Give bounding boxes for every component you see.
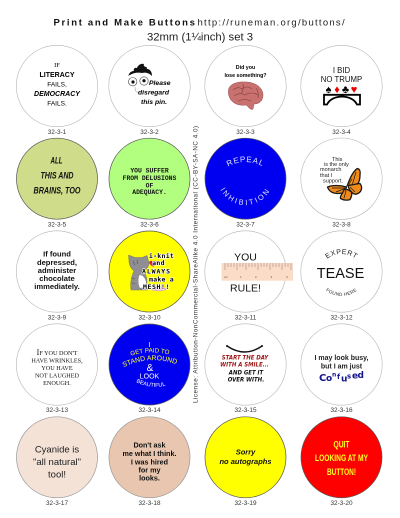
button 32-3-8: This	[332, 157, 343, 163]
icon: card suits: ♣	[342, 84, 349, 96]
button 32-3-14: GET PAID TO	[130, 348, 170, 356]
icon: ruler: cm	[224, 275, 228, 279]
icon: bridge	[324, 95, 360, 104]
button 32-3-6: YOU SUFFER	[130, 168, 169, 174]
button 32-3-2	[109, 45, 190, 136]
button 32-3-13: ENOUGH.	[43, 380, 71, 387]
button 32-3-6: 32-3-6	[140, 222, 159, 228]
button 32-3-19: no autographs	[219, 457, 272, 466]
icon: brain	[228, 82, 263, 110]
button 32-3-18: me what I think.	[123, 449, 176, 458]
title: http://runeman.org/buttons/	[198, 18, 346, 28]
button 32-3-19	[205, 417, 286, 507]
confused wordmark: n	[332, 372, 336, 378]
button 32-3-15: AND GET IT	[228, 370, 265, 376]
button 32-3-18: Don't ask	[133, 441, 166, 450]
button 32-3-15: 32-3-15	[234, 407, 257, 414]
button 32-3-10: 32-3-10	[138, 314, 161, 322]
button 32-3-9: chocolate	[39, 274, 75, 283]
button 32-3-18	[109, 417, 190, 507]
icon: card suits: ♥	[351, 84, 357, 96]
button 32-3-6: ADEQUACY.	[132, 189, 167, 196]
button 32-3-4	[301, 45, 382, 136]
button 32-3-13: IF YOU DON'T	[37, 348, 78, 357]
icon: smile	[226, 345, 263, 352]
button 32-3-20: 32-3-20	[330, 500, 353, 507]
button 32-3-6: OF	[146, 182, 153, 190]
confused wordmark: e	[352, 372, 358, 382]
button 32-3-14: 32-3-14	[138, 407, 161, 414]
button 32-3-7: REPEAL	[226, 156, 262, 166]
button 32-3-13: 32-3-13	[46, 407, 68, 414]
button 32-3-10: make a	[149, 276, 174, 284]
button 32-3-1: IF	[54, 62, 60, 69]
button 32-3-16: but I am just	[321, 364, 363, 370]
button 32-3-3: Did you	[236, 65, 255, 71]
button 32-3-13: YOU HAVE	[41, 365, 73, 372]
button 32-3-17: Cyanide is	[35, 444, 79, 456]
button 32-3-6	[109, 138, 190, 228]
button 32-3-5: ALL	[50, 156, 62, 166]
button 32-3-11	[205, 231, 293, 322]
confused wordmark: f	[337, 373, 341, 381]
confused wordmark: C	[319, 373, 326, 384]
confused wordmark: o	[326, 374, 332, 384]
icon: ruler: 4	[286, 275, 288, 279]
icon: card suits	[326, 84, 357, 96]
button 32-3-1: LITERACY	[40, 72, 75, 79]
icon: cat	[128, 255, 168, 291]
button 32-3-16	[301, 324, 382, 414]
button 32-3-9: If found	[43, 250, 71, 258]
confused wordmark: s	[347, 372, 351, 380]
button 32-3-8	[301, 138, 382, 228]
button 32-3-13: NOT LAUGHED	[35, 372, 80, 380]
button 32-3-14: BEAUTIFUL	[136, 378, 166, 387]
button 32-3-9: immediately.	[34, 282, 80, 291]
button 32-3-3: 32-3-3	[236, 129, 255, 136]
title: Print and Make Buttons	[54, 18, 197, 28]
button 32-3-2: Please	[149, 80, 171, 87]
button 32-3-14: STAND AROUND	[122, 355, 177, 366]
button 32-3-1: FAILS,	[47, 82, 67, 88]
button 32-3-10: MESH!!	[143, 283, 170, 291]
button 32-3-1: DEMOCRACY	[34, 91, 81, 98]
button 32-3-19: Sorry	[236, 447, 256, 456]
button 32-3-11: 32-3-11	[235, 314, 257, 322]
button 32-3-2: this pin.	[141, 99, 167, 106]
confused wordmark	[319, 371, 364, 384]
button 32-3-12: EXPERT	[325, 249, 358, 258]
button 32-3-9: depressed,	[37, 258, 77, 267]
icon: ruler: 3	[270, 275, 272, 279]
button 32-3-5: THIS AND	[40, 170, 74, 180]
button 32-3-10: i-knit	[149, 252, 174, 260]
button 32-3-18: 32-3-18	[138, 500, 161, 507]
button 32-3-19: 32-3-19	[234, 500, 257, 507]
button 32-3-12: TEASE	[317, 266, 365, 282]
button 32-3-7: INHIBITION	[220, 188, 270, 206]
button 32-3-20	[301, 417, 382, 507]
button 32-3-1: FAILS.	[47, 100, 67, 108]
title	[54, 18, 346, 43]
button 32-3-3: lose something?	[224, 73, 267, 79]
button 32-3-20: QUIT	[334, 439, 350, 449]
button 32-3-14: &	[147, 363, 154, 374]
button 32-3-16: I may look busy,	[315, 355, 369, 362]
button 32-3-12	[300, 230, 382, 322]
button 32-3-5: 32-3-5	[48, 222, 67, 228]
button 32-3-12: 32-3-12	[330, 314, 353, 322]
button 32-3-20: LOOKING AT MY	[315, 453, 368, 463]
button 32-3-9: administer	[38, 266, 76, 275]
button 32-3-16: 32-3-16	[330, 407, 353, 414]
button 32-3-2: 32-3-2	[140, 129, 159, 136]
button 32-3-7: 32-3-7	[236, 222, 255, 228]
button 32-3-20: BUTTON!	[327, 467, 356, 477]
button 32-3-8: that I	[320, 173, 333, 179]
button 32-3-18: looks.	[139, 474, 160, 483]
icon: card suits: ♦	[334, 84, 340, 96]
button 32-3-7	[204, 138, 286, 228]
icon: ruler	[222, 263, 293, 281]
button 32-3-8: 32-3-8	[332, 222, 351, 228]
button 32-3-8: is the only	[324, 162, 349, 168]
button 32-3-11: RULE!	[230, 282, 261, 294]
button 32-3-5	[16, 138, 98, 228]
icon: ruler: 2	[255, 275, 257, 279]
button 32-3-15: START THE DAY	[222, 354, 269, 362]
icon: ruler: 1	[240, 275, 242, 279]
button 32-3-8: monarch	[320, 167, 341, 173]
button 32-3-5: BRAINS, TOO	[34, 186, 80, 196]
button 32-3-15	[205, 324, 286, 414]
confused wordmark: u	[341, 374, 347, 384]
button 32-3-17: 32-3-17	[46, 500, 68, 507]
button 32-3-14	[108, 324, 190, 414]
button 32-3-8: support.	[323, 179, 343, 185]
button 32-3-4: NO TRUMP	[321, 75, 362, 84]
button 32-3-1: 32-3-1	[48, 129, 67, 136]
button 32-3-14: LOOK	[140, 374, 160, 380]
button 32-3-17: tool!	[48, 470, 66, 480]
button 32-3-13	[16, 324, 98, 414]
button 32-3-6: FROM DELUSIONS	[123, 175, 177, 182]
button 32-3-10: and	[152, 259, 165, 267]
button 32-3-13: HAVE WRINKLES,	[31, 358, 83, 364]
license text: License: Attribution-NonCommercial-ShareAlike 4.0 International (CC-BY-SA-NC 4.0)	[192, 125, 200, 403]
button 32-3-10: ALWAYS	[142, 268, 171, 276]
button 32-3-18: I was hired	[131, 457, 168, 466]
button 32-3-17: "all natural"	[33, 457, 81, 468]
button 32-3-9	[16, 231, 98, 322]
button 32-3-15: WITH A SMILE...	[220, 362, 269, 368]
button 32-3-15: OVER WITH.	[228, 376, 264, 384]
button 32-3-4: I BID	[333, 66, 351, 75]
button 32-3-2: disregard	[138, 90, 170, 96]
button 32-3-11: YOU	[234, 252, 257, 264]
button 32-3-4: 32-3-4	[332, 129, 351, 136]
icon: cartoon face	[128, 64, 152, 92]
button 32-3-1	[16, 45, 98, 136]
title: 32mm (1¼inch) set 3	[147, 31, 253, 43]
button 32-3-14: I	[148, 340, 151, 349]
button 32-3-10	[109, 231, 190, 322]
icon: monarch butterfly	[328, 168, 362, 200]
button 32-3-9: 32-3-9	[48, 314, 67, 322]
button 32-3-12: FOUND HERE	[326, 288, 357, 296]
button 32-3-17	[16, 417, 98, 507]
button 32-3-18: for my	[139, 465, 160, 474]
confused wordmark: d	[358, 371, 364, 381]
button 32-3-3	[205, 45, 286, 136]
icon: card suits: ♠	[326, 84, 332, 96]
